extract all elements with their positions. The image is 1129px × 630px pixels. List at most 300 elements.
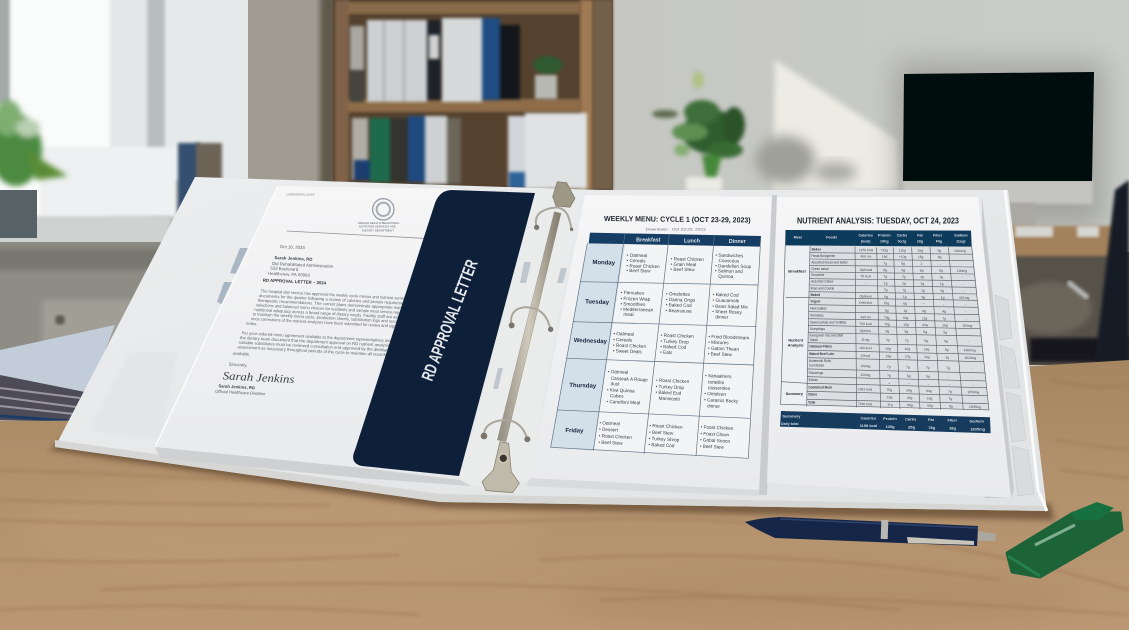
binder: side tabs — [995, 295, 1034, 496]
nutrient values: 94g — [926, 389, 932, 393]
nutrient values: + — [888, 381, 890, 385]
nutrient values: 5g — [940, 289, 944, 293]
nutrient values: 40g — [922, 323, 928, 327]
nutrient food names: Bakes — [812, 247, 821, 251]
nutrient values: 5g — [901, 268, 905, 272]
nutrient values: 400 mc — [861, 254, 872, 259]
nutrient values: 8g — [904, 330, 908, 334]
nutrient values: 150mg — [962, 324, 973, 328]
summary band: 38g — [949, 425, 957, 430]
nutrient values: - — [972, 383, 974, 387]
nutrient values: 1g — [940, 282, 944, 286]
nutrient values: -- — [923, 302, 925, 306]
nutrient food names — [808, 247, 848, 404]
menu items: • Baked Cod — [648, 442, 675, 448]
nutrient values: Optional — [859, 294, 872, 299]
nutrient values: 16g — [918, 249, 923, 253]
menu items: • Turkey Drop — [656, 384, 685, 390]
summary band: Daily total — [781, 422, 798, 426]
background: window sill and radiator — [0, 216, 170, 357]
menu items: • Oatmeal — [613, 331, 634, 337]
nutrient values: 5g — [885, 308, 889, 313]
nutrient values: 70g — [884, 322, 890, 326]
nutrient values: 7g — [948, 397, 952, 401]
nutrient values: 110g — [899, 248, 906, 252]
nutrient table header: Carbs — [897, 233, 907, 237]
menu items: • Foast Chicken — [701, 424, 734, 431]
menu items: dust — [610, 381, 620, 387]
summary band: 85g — [908, 425, 916, 430]
background: wooden bookcase — [333, 0, 613, 190]
nutrient values — [858, 248, 981, 409]
background: desktop monitor — [895, 62, 1105, 227]
menu items: Casseak A Rouge — [611, 376, 648, 382]
gap between the two right pages — [759, 195, 777, 495]
nutrient food names: Buttermilk Rolls — [809, 359, 831, 363]
nutrient values: 1550mg — [967, 390, 979, 394]
nutrient values: 1805mg — [969, 405, 981, 409]
menu items: • Frozen Wrap — [620, 296, 651, 302]
nutrient food names: Sweet potato and Tortillas — [810, 320, 847, 324]
letter body: nutritional adequacy across a broad range of dietary needs. Facility staff are asked — [254, 307, 405, 320]
nutrient values: 1g — [920, 282, 924, 286]
menu items: • Gatoin Thean — [708, 346, 739, 352]
nutrient values: - — [962, 282, 964, 286]
menu header row: Dinner — [729, 239, 746, 245]
letter body: documents for the quarter following a review of calories and protein requirements — [259, 293, 409, 306]
nutrient values: 13g — [903, 323, 909, 327]
nutrient values: 80g — [903, 316, 909, 320]
binder: small spine labels — [493, 262, 567, 389]
nutrient values: - — [965, 310, 967, 314]
nutrient food names: Evergreen rice and pilaf — [810, 334, 843, 338]
letterhead: CONFIDENTIAL CLINIC — [286, 192, 315, 196]
nutrient values: 7190 kcal — [858, 402, 872, 406]
nutrient values: 5g — [945, 348, 949, 352]
nutrient values: 150mg — [860, 364, 871, 368]
background: room wall — [0, 0, 1129, 430]
nutrient values: 1500mg — [964, 348, 976, 352]
nutrient values: 180 kcal — [859, 346, 872, 350]
signature block — [215, 362, 295, 396]
nutrient food names: Total — [808, 400, 815, 404]
nutrient values: 7g — [902, 288, 906, 292]
bottom clasp — [482, 442, 519, 493]
menu items: • Turkey Shrop — [649, 436, 680, 442]
nutrient values: - — [928, 382, 929, 386]
highlighter — [1007, 502, 1122, 577]
nutrient values: 430 kn — [861, 315, 871, 319]
nutrient values: 10g — [924, 355, 930, 359]
nutrient table header: Sodium — [954, 233, 968, 237]
menu items: • Cereals — [613, 337, 633, 343]
menu items: • Beef Stew — [598, 440, 623, 446]
background: beige wall column — [248, 0, 338, 185]
signature block: Sarah Jenkins, RD — [218, 383, 255, 390]
menu items: • Salmon and — [715, 268, 743, 274]
nutrient table header: Fat — [917, 233, 924, 237]
nutrient food names: Extras — [809, 378, 818, 382]
nutrient values: 1g — [941, 295, 945, 300]
navy tab: RD approval letter — [353, 190, 535, 476]
menu items: • Pancakes — [621, 290, 645, 296]
menu day labels: Monday — [592, 260, 616, 267]
nutrient food names: Tomatoes — [810, 313, 824, 317]
nutrient values: 15g — [924, 347, 930, 351]
binder shadow on table — [50, 440, 1055, 520]
nutrient values: 700 kcal — [859, 322, 872, 326]
menu items: • Roast Chicken — [661, 333, 694, 339]
navy tab: RD approval letter: RD APPROVAL LETTER — [418, 257, 482, 383]
menu items: • Gobal Snoon — [700, 437, 731, 444]
nutrient values: 9g — [937, 249, 941, 253]
menu header row: Lunch — [684, 238, 700, 244]
menu items: • Dessert — [599, 427, 619, 433]
letter body: the dietary team document that the department approval on RD nutrient analysis — [240, 335, 390, 348]
binder: open white cover — [55, 177, 1047, 511]
nutrient food names: Diuns — [808, 393, 817, 397]
letter body: The hospital diet service has approved the weekly cycle menus and nutrient summary — [261, 288, 412, 301]
menu items: Quinoa — [718, 274, 734, 279]
summary band: Fat — [928, 417, 935, 422]
nutrient values: 1620mg — [964, 356, 976, 360]
summary band — [780, 411, 991, 433]
nutrient food names: Pasta Bolognese — [811, 254, 835, 258]
nutrient values: 5g — [923, 330, 927, 334]
nutrient values: 15g — [884, 301, 889, 305]
nutrient values: - — [949, 383, 950, 387]
nutrient values: 15g — [918, 255, 924, 259]
summary band: Fiber — [947, 418, 958, 423]
nutrient table header: 0o:lg — [898, 239, 906, 243]
nutrient food names: Oatmeal Plates — [809, 345, 832, 349]
nutrient food names: Assorted Cakes — [811, 280, 834, 284]
nutrient values: 15g — [886, 354, 891, 358]
background: sunlight patch on wall — [755, 60, 899, 190]
nutrient values: 7g — [926, 366, 930, 370]
letterhead: NUTRITION SERVICES AND — [359, 225, 396, 229]
menu items: • Oatmeal — [599, 420, 620, 426]
nutrient table — [781, 230, 989, 410]
nutrient values: 1g — [902, 281, 906, 285]
nutrient values: - — [963, 289, 965, 293]
letterhead — [286, 192, 430, 239]
nutrient values: 180mg — [957, 269, 967, 273]
nutrient values: 1920mg — [954, 249, 966, 253]
nutrient table header: Calories — [858, 233, 873, 237]
menu items: • Baked Cod — [713, 292, 739, 298]
nutrient values: 710g — [881, 248, 888, 252]
nutrient values: +10g — [899, 255, 907, 259]
summary band: 105g — [885, 424, 895, 429]
nutrient table header: Fiber — [933, 233, 943, 237]
summary band: Sodium — [969, 418, 984, 423]
letter body: suitable substitutes must be reviewed consultation and approved by the dietitian — [239, 340, 389, 353]
nutrient values: 7g — [883, 275, 887, 279]
summary band: Summary — [782, 413, 801, 418]
menu items: • Foast Clown — [700, 431, 730, 437]
menu items: tortellini — [708, 379, 724, 385]
binder: blue-grey index marks — [217, 248, 248, 305]
binder: metal ring mechanism — [481, 182, 575, 493]
letter body — [233, 288, 412, 357]
nutrient values: 5g — [943, 330, 947, 334]
nutrient values: 7g — [946, 366, 950, 370]
menu day labels — [565, 260, 616, 435]
nutrient values: 130mg — [860, 373, 871, 377]
nutrient values: 70 kcal — [860, 274, 871, 278]
menu items: • Canelloni Meal — [606, 399, 640, 405]
summary band: 1198 kcal — [860, 423, 877, 428]
nutrient food names: Smoothie — [811, 273, 825, 277]
letter text in zoom coordinates — [215, 192, 430, 396]
menu items: • Baked Eud — [655, 390, 682, 396]
nutrient values: 7g — [887, 365, 891, 369]
summary band: Carbs — [905, 417, 917, 422]
menu items: meal — [623, 312, 634, 317]
menu items: casseroles — [708, 385, 731, 391]
nutrient values: 9g — [921, 295, 925, 299]
nutrient table header: Protein — [878, 233, 891, 237]
wooden table — [0, 360, 1129, 630]
nutrient section labels: Nutrient — [788, 338, 804, 342]
menu items: • Ontoleen — [704, 391, 727, 397]
menu items: • Dandelion Soup — [715, 263, 752, 269]
menu items: • Grain Meal — [671, 262, 696, 267]
menu title: WEEKLY MENU: CYCLE 1 (OCT 23-29, 2023) — [604, 214, 751, 225]
menu items: • Roast Chicken — [599, 433, 632, 440]
background: back desk, keyboard and chair — [1000, 180, 1129, 365]
nutrient values: 5g — [924, 339, 928, 343]
nutrient values: - — [865, 281, 866, 285]
letter body: to maintain the weekly menu cycle, production sheets, substitution logs and records — [253, 311, 403, 324]
date and recipient: Old Rehabilitated Administration — [272, 261, 334, 269]
nutrient values: 4g — [922, 309, 926, 313]
menu items: • Bean Salad Mix — [712, 304, 749, 310]
menu items: • Oatmeal — [608, 369, 628, 375]
nutrient values: 1 — [920, 262, 922, 266]
letter body: selections and balanced menu choices for residents and sample meal service reports — [256, 302, 406, 315]
nutrient section labels — [786, 269, 806, 396]
nutrient values: - — [968, 340, 969, 344]
nutrient table header: Foods — [826, 236, 837, 240]
letter body: available. — [233, 351, 250, 357]
menu header row — [636, 238, 746, 245]
menu items: • Beef Stew — [670, 267, 695, 272]
nutrient values: 30g — [907, 396, 913, 400]
background: binders on shelves — [350, 18, 587, 189]
nutrient food names: Assorted bread and butter — [811, 260, 848, 264]
nutrient values: 5g — [926, 374, 930, 379]
background: wall plant in white pot — [652, 71, 745, 191]
letterhead: DIETARY DEPARTMENT — [362, 228, 394, 232]
menu items: • Roast Chicken — [656, 378, 690, 384]
menu items: Couscous — [719, 258, 740, 264]
menu day labels: Wednesday — [574, 338, 608, 345]
menu items: • Sheet Rosey — [712, 309, 743, 315]
menu items: • Roast Chicken — [671, 256, 704, 262]
letter body: notes. — [246, 321, 258, 326]
nutrient food names: Yogurt — [810, 300, 821, 304]
nutrient values: 7g — [942, 317, 946, 321]
letter page stack — [155, 447, 470, 486]
nutrient values: 8g — [883, 268, 887, 272]
nutrient values: 16g — [942, 323, 948, 327]
nutrient values: Deficient — [859, 301, 872, 305]
letterhead: INDIANA HEALTH BEHAVIORAL — [358, 221, 400, 225]
nutrient food names: Salad — [810, 338, 818, 342]
nutrient food names: Baked — [811, 293, 820, 297]
nutrient section labels: Analysis — [788, 343, 804, 347]
menu items: • Roast Chicken — [649, 423, 683, 430]
nutrient food names: Combined Meal — [808, 385, 832, 389]
menu items: • Roast Chicken — [613, 343, 647, 349]
nutrient values: 11g — [887, 403, 893, 407]
menu items: • Caramiz Bucky — [704, 397, 739, 404]
menu items: • Baked Cod — [666, 302, 692, 308]
nutrient values: 75g — [886, 388, 892, 392]
menu items: Cubes — [610, 393, 624, 399]
letter body: Per your ordered menu agreement available to the department representatives and — [242, 330, 392, 343]
menu items — [598, 253, 752, 450]
menu items: • Beansouse — [666, 308, 692, 314]
nutrient values: 4g — [942, 309, 946, 313]
menu table — [551, 233, 761, 458]
rings — [484, 207, 572, 440]
nutrient section labels: Breakfast — [788, 269, 806, 273]
nutrient food names: New salads — [810, 306, 827, 310]
nutrient values: 9g — [938, 255, 942, 259]
menu items: • Beef Stew — [708, 351, 733, 357]
nutrient values: 10g — [887, 395, 893, 399]
nutrient values: 7g — [939, 275, 943, 279]
nutrient values: - — [940, 262, 941, 266]
nutrient values: Optional — [860, 268, 872, 272]
menu day labels: Thursday — [569, 383, 597, 390]
nutrient values: 1481 kcal — [858, 387, 872, 392]
menu items: • Turkey Drop — [660, 339, 689, 345]
date and recipient: Sarah Jenkins, RD — [274, 255, 313, 262]
date and recipient — [263, 243, 335, 286]
metal spine bar — [497, 212, 561, 442]
menu items: • Mediterranean — [620, 307, 654, 313]
panel: weekly menu page — [530, 195, 772, 490]
nutrient food names: Green salad — [811, 267, 829, 271]
nutrient values: 50g — [927, 404, 933, 408]
letter body: assessment as necessary throughout periods of the cycle to maintain all records — [237, 344, 387, 357]
nutrient table header: Meal — [794, 236, 802, 240]
nutrient values: 10g — [904, 347, 910, 351]
nutrient values: 7g — [887, 374, 891, 378]
pen — [745, 517, 996, 546]
nutrient values: 11g — [922, 316, 927, 320]
menu items: • Kiwi Quinoa — [607, 387, 635, 393]
menu items: • Roast Chicken — [626, 263, 660, 269]
nutrient values: - — [962, 276, 963, 280]
summary band: Protein — [883, 416, 897, 421]
nutrient values: - — [965, 302, 966, 306]
menu day labels: Tuesday — [585, 299, 610, 306]
nutrient table header: 11ugr — [956, 239, 966, 243]
menu items: dinner — [707, 403, 721, 409]
summary band: 78g — [928, 425, 936, 430]
nutrient values: 70g — [884, 316, 890, 320]
nutrient food names: Cornbread — [809, 364, 824, 368]
nutrient values: 11mg — [861, 338, 870, 342]
menu day labels: Friday — [565, 428, 584, 435]
nutrient values: 5g — [901, 262, 905, 266]
nutrient values: 16d — [882, 255, 888, 259]
top clasp — [553, 182, 575, 207]
nutrient values: 7g — [886, 338, 890, 342]
menu items: • Oatmeal — [627, 253, 647, 258]
nutrient values: 5g — [939, 269, 943, 273]
date and recipient: Healthview, PA 00983 — [268, 271, 311, 278]
menu items: • Eats — [660, 350, 673, 355]
menu items: Mannicotti — [659, 396, 680, 402]
nutrient values: 3g — [945, 355, 949, 360]
nutrient table header: F0g — [936, 239, 942, 243]
letter body: therapeutic recommendations. The current plans demonstrate appropriate nutrient — [258, 298, 408, 311]
signature block: Sincerely, — [229, 362, 248, 368]
letter page — [155, 186, 470, 478]
nutrient food names: Flavorings — [809, 371, 824, 375]
nutrient values: 5g — [907, 374, 911, 378]
background: left window and curtain — [0, 0, 250, 230]
nutrient values: 7g — [884, 288, 888, 292]
nutrient values: 5g — [944, 339, 948, 343]
nutrient values: 10g — [885, 347, 891, 351]
nutrient values: 1g — [920, 275, 924, 279]
nutrient values: 7g — [906, 365, 910, 369]
date and recipient: RD APPROVAL LETTER – 2024 — [263, 278, 327, 285]
nutrient food names: Bran and Cookie — [811, 286, 834, 290]
summary band: 1805mg — [970, 426, 986, 431]
nutrient values: 5g — [885, 329, 889, 333]
nutrient table header: 10g — [917, 239, 923, 243]
nutrient values: - — [943, 302, 944, 306]
menu items: • Beef Stew — [649, 430, 674, 436]
nutrient values: - — [966, 317, 967, 321]
menu subtitle: Downtown · Oct 23-29, 2023 — [646, 228, 706, 232]
menu items: • Smoothies — [620, 301, 646, 307]
menu items: • Omelettes — [666, 291, 691, 297]
nutrient table header: 10hg — [880, 239, 889, 243]
nutrient table header — [794, 233, 968, 243]
panel: nutrient analysis page — [767, 197, 1014, 498]
menu items: • Sanaalners — [705, 373, 732, 379]
nutrient table header: (kcal) — [861, 239, 871, 243]
nutrient values: 7g — [902, 275, 906, 279]
nutrient values: 001mg — [959, 296, 970, 300]
menu items: • Cereals — [627, 258, 646, 263]
nutrient values: 1g — [903, 295, 907, 299]
nutrient values: -- — [908, 382, 910, 386]
menu items: • Mixtures — [708, 340, 729, 345]
nutrient values: 7g — [883, 261, 887, 265]
menu header row: Breakfast — [636, 238, 661, 244]
nutrient values: 1676 kcal — [859, 248, 873, 252]
nutrient values: - — [971, 376, 973, 380]
menu page stack — [526, 478, 760, 496]
menu items: • Beef Stew — [626, 268, 651, 274]
nutrient title: NUTRIENT ANALYSIS: TUESDAY, OCT 24, 2023 — [797, 216, 959, 225]
nutrient values: 1g — [884, 281, 888, 285]
menu items: • Food Bloodstream — [708, 334, 750, 340]
nutrient values: 90g — [907, 403, 913, 407]
menu items: • Guacamole — [712, 298, 740, 303]
date and recipient: 533 Boulevard — [270, 266, 299, 272]
